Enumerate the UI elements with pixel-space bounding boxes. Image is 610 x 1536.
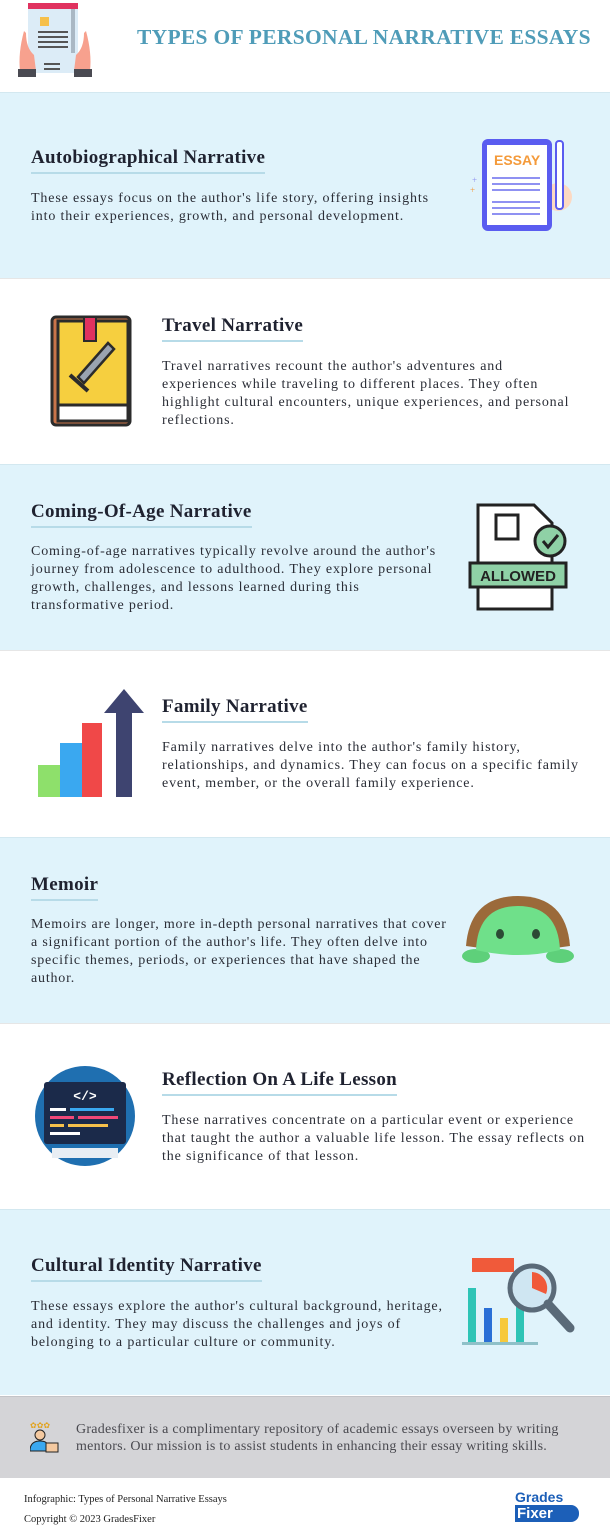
title: TYPES OF PERSONAL NARRATIVE ESSAYS [137,25,591,49]
icon: essay tablet: ESSAY [494,152,541,168]
text block: These essays explore the author's cultural background, heritage, and identity. They may discuss the challenges and joys of belonging to a particular culture or community. [31,1299,443,1350]
icon: hands holding document [18,3,92,77]
icon: chart with magnifier [462,1258,574,1345]
panel: autobiographical [0,92,610,278]
text block: Travel narratives recount the author's adventures and experiences while traveling to different places. They often highlight cultural encounters, unique experiences, and personal reflections. [162,359,569,428]
heading: Reflection On A Life Lesson [162,1069,397,1090]
text block: Gradesfixer is a complimentary repository of academic essays overseen by writing mentors. Our mission is to assist students in enhancing their essay writing skills. [76,1422,559,1454]
icon: code monitor: </> [73,1089,97,1104]
icon: code monitor [35,1066,135,1166]
heading: Memoir [31,874,98,895]
heading: Coming-Of-Age Narrative [31,501,252,522]
heading: Autobiographical Narrative [31,147,265,168]
heading: Family Narrative [162,696,308,717]
icon: thumbs up person: ✿✿✿ [30,1421,50,1430]
logo: Fixer [517,1505,553,1522]
icon: thumbs up person [30,1421,58,1452]
icon: essay tablet [470,139,572,231]
panel: coming of age [0,464,610,650]
bottom credits: Copyright © 2023 GradesFixer [24,1514,155,1525]
panel: family [0,650,610,836]
text block: specific themes, periods, or experiences that have shaped the [31,953,420,968]
heading: Cultural Identity Narrative [31,1255,262,1276]
icon: turtle [462,896,574,963]
icon: bar chart with arrow [38,689,144,797]
text block: These essays focus on the author's life story, offering insights into their experiences, growth, and personal development. [31,191,429,224]
text block: author. [31,971,75,986]
text block: a significant portion of the author's life. They often delve into [31,935,428,950]
panel: reflection [0,1023,610,1209]
icon: book with sword [50,316,132,426]
icon: essay tablet: + [470,185,475,195]
text block: Memoirs are longer, more in-depth personal narratives that cover [31,917,447,932]
panel: travel [0,278,610,464]
icon: essay tablet: + [472,175,477,185]
footer note [0,1396,610,1478]
bottom credits: Infographic: Types of Personal Narrative Essays [24,1494,227,1505]
text block: These narratives concentrate on a particular event or experience that taught the author a valuable life lesson. The essay reflects on the significance of that lesson. [162,1113,585,1164]
logo [515,1489,579,1522]
text block: Coming-of-age narratives typically revolve around the author's journey from adolescence to adulthood. They explore personal growth, challenges, and lessons learned during this transformative period. [31,544,436,613]
heading: Travel Narrative [162,315,303,336]
header [0,0,610,92]
panel: memoir [0,837,610,1023]
text block: Family narratives delve into the author's family history, relationships, and dynamics. They can focus on a specific family event, member, or the overall family experience. [162,740,579,791]
bottom credits [24,1494,227,1525]
icon: allowed document: ALLOWED [480,568,556,585]
icon: allowed document [468,504,568,610]
panel: cultural identity [0,1209,610,1395]
text block [31,917,447,986]
logo: Grades [515,1489,563,1505]
